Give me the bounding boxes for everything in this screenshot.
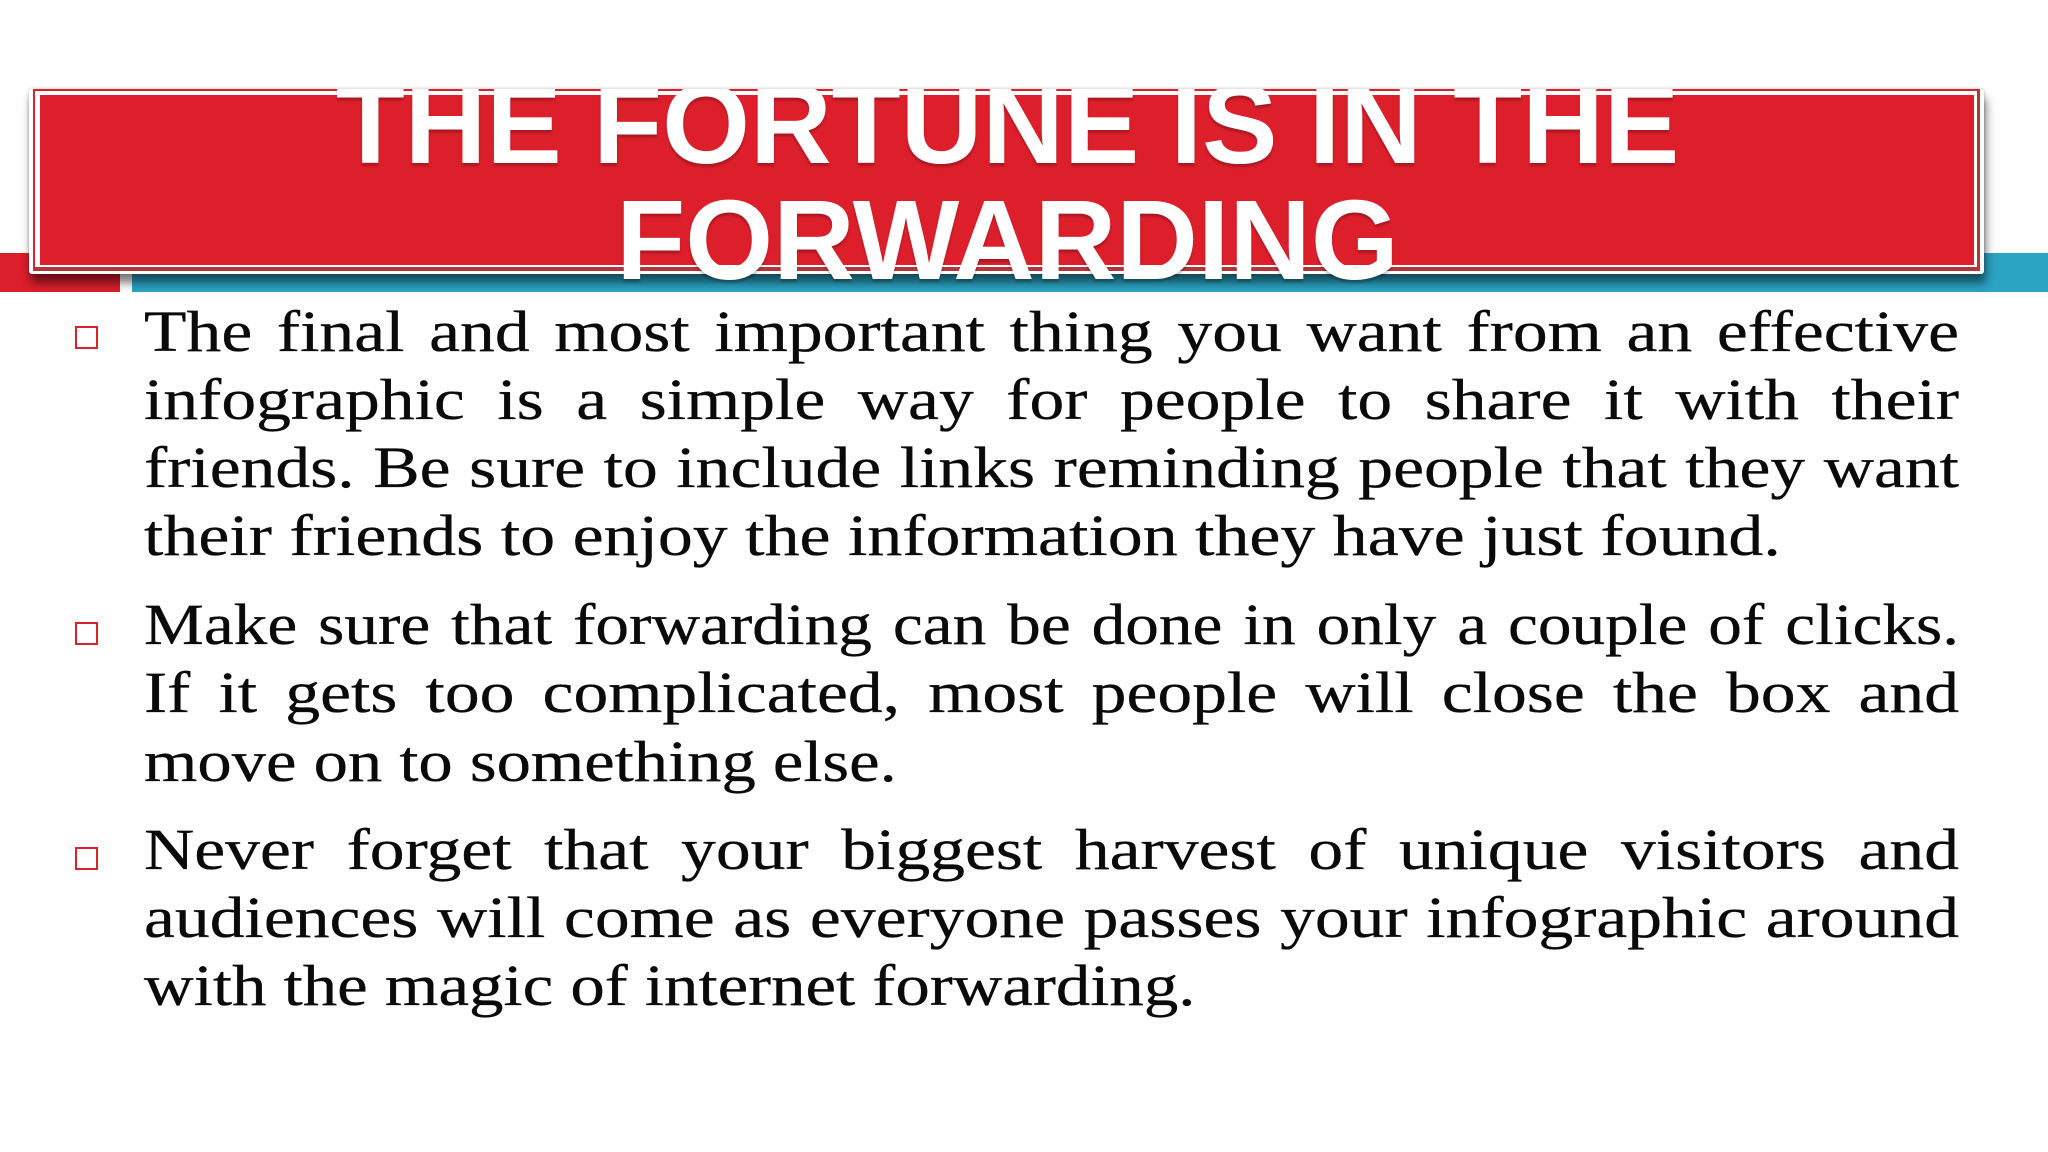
paragraph 2: Make sure that forwarding can be done in only a couple of clicks. bbox=[144, 592, 1959, 657]
bullet 2 bbox=[75, 622, 98, 645]
bullet 1 bbox=[75, 326, 98, 349]
bullet 3 bbox=[75, 847, 98, 870]
paragraph 3: with the magic of internet forwarding. bbox=[144, 953, 1195, 1018]
banner title text bbox=[336, 89, 1679, 299]
title banner bbox=[29, 89, 1984, 274]
paragraph 3 bbox=[144, 817, 1959, 1018]
paragraph 1 bbox=[144, 299, 1959, 568]
paragraph 1: friends. Be sure to include links reminding people that they want bbox=[144, 435, 1959, 500]
paragraph 2 bbox=[144, 592, 1959, 794]
paragraph 2: If it gets too complicated, most people will close the box and bbox=[144, 660, 1959, 725]
banner red fill bbox=[40, 95, 1974, 265]
paragraph 3: Never forget that your biggest harvest of unique visitors and bbox=[144, 817, 1959, 882]
paragraph 1: infographic is a simple way for people to share it with their bbox=[144, 367, 1959, 432]
band: red segment bbox=[0, 253, 120, 292]
paragraph 1: their friends to enjoy the information they have just found. bbox=[144, 503, 1781, 568]
paragraph 1: The final and most important thing you want from an effective bbox=[144, 299, 1959, 364]
paragraph 2: move on to something else. bbox=[144, 729, 897, 794]
paragraph 3: audiences will come as everyone passes your infographic around bbox=[144, 885, 1959, 950]
band: teal segment bbox=[132, 253, 2048, 292]
banner thin red frame bbox=[33, 89, 1980, 271]
